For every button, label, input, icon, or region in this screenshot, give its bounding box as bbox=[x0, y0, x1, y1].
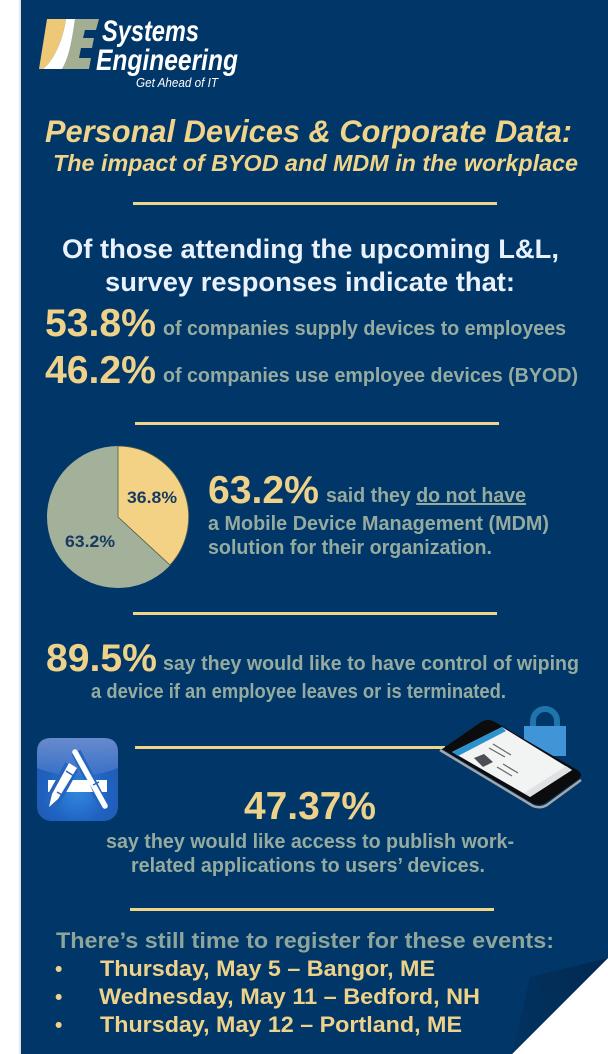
event: Bedford: • bbox=[55, 986, 62, 1009]
heading: survey intro: Of those attending the upcoming L&L, bbox=[62, 234, 559, 264]
logo wordmark: Engineering: Engineering bbox=[96, 44, 238, 77]
subtitle: The impact of BYOD and MDM in the workplace bbox=[53, 150, 578, 176]
divider bbox=[133, 612, 497, 615]
page shadow bbox=[18, 0, 21, 1054]
heading: survey intro bbox=[62, 234, 559, 297]
stat: 89.5% remote wipe: say they would like to have control of wiping bbox=[163, 653, 579, 675]
stat: 46.2% BYOD: 46.2% bbox=[45, 349, 156, 392]
logo: Systems Engineering bbox=[39, 15, 238, 90]
stat: 63.2% no MDM bbox=[208, 469, 549, 559]
stat: 53.8% supply devices: 53.8% bbox=[45, 302, 156, 345]
text: publish applications: related applications to users’ devices. bbox=[131, 855, 485, 877]
icon: app store bbox=[37, 738, 118, 821]
pie label 36.8%: 36.8% bbox=[127, 488, 177, 507]
event: Portland: • bbox=[55, 1014, 62, 1037]
icon: padlock bbox=[524, 709, 566, 756]
heading: events: There’s still time to register for these events: bbox=[56, 928, 554, 953]
icon: smartphone bbox=[440, 720, 581, 807]
logo tagline: Get Ahead of IT bbox=[136, 75, 219, 90]
heading: survey intro: survey responses indicate that: bbox=[105, 267, 515, 297]
logo mark bbox=[39, 19, 99, 69]
stat: 63.2% no MDM: 63.2% bbox=[208, 469, 319, 512]
event: Bangor: • bbox=[55, 958, 62, 981]
pie label 63.2%: 63.2% bbox=[65, 532, 115, 551]
stat: 63.2% no MDM: said they do not have bbox=[326, 485, 526, 507]
divider bbox=[133, 202, 497, 205]
stat: 46.2% BYOD: of companies use employee devices (BYOD) bbox=[163, 365, 578, 387]
event: Bangor: Thursday, May 5 – Bangor, ME bbox=[100, 956, 435, 981]
page curl fold bbox=[512, 958, 608, 1054]
stat: 89.5% remote wipe: a device if an employee leaves or is terminated. bbox=[91, 681, 506, 703]
stat: 63.2% no MDM: a Mobile Device Management (MDM) bbox=[208, 513, 549, 535]
stat: 47.37%: 47.37% bbox=[244, 785, 376, 828]
stat: 53.8% supply devices: of companies supply devices to employees bbox=[163, 318, 566, 340]
text: publish applications bbox=[106, 831, 514, 877]
event: Portland: Thursday, May 12 – Portland, ME bbox=[100, 1012, 462, 1037]
stat: 46.2% BYOD bbox=[45, 349, 578, 392]
stat: 53.8% supply devices bbox=[45, 302, 566, 345]
text: publish applications: say they would like access to publish work- bbox=[106, 831, 514, 853]
divider bbox=[130, 908, 494, 911]
stat: 89.5% remote wipe: 89.5% bbox=[46, 637, 157, 680]
logo wordmark: Systems: Systems bbox=[102, 15, 199, 48]
stat: 89.5% remote wipe bbox=[46, 637, 579, 703]
divider bbox=[135, 746, 445, 749]
pie chart: MDM bbox=[47, 446, 189, 588]
divider bbox=[135, 422, 499, 425]
title: Personal Devices & Corporate Data: bbox=[45, 113, 572, 149]
event list bbox=[55, 956, 480, 1037]
event: Bedford: Wednesday, May 11 – Bedford, NH bbox=[99, 984, 480, 1009]
stat: 63.2% no MDM: solution for their organization. bbox=[208, 537, 492, 559]
